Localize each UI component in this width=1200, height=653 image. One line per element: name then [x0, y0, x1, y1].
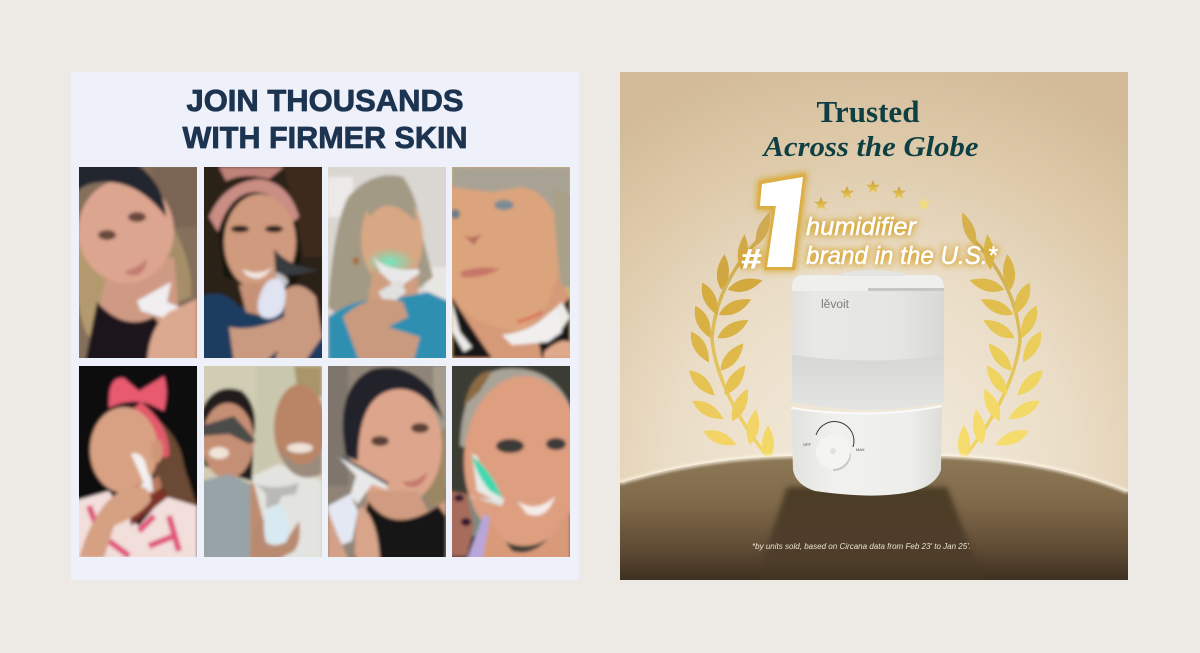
- icon: right laurel branch: [958, 210, 1047, 461]
- badge: number one humidifier brand: humidifier: [806, 213, 918, 241]
- footnote: *by units sold, based on Circana data from Feb 23' to Jan 25'.: [752, 542, 971, 551]
- icon: five stars arc: [814, 180, 931, 210]
- photo: blonde woman with green-lit device: [328, 167, 446, 358]
- dial: [803, 422, 865, 471]
- icon: left laurel branch: [685, 210, 774, 461]
- panel: trusted across the globe: [620, 72, 1128, 590]
- heading: trusted across the globe: [762, 100, 978, 156]
- floor with glowing horizon: [620, 456, 1128, 590]
- base: [791, 406, 942, 496]
- photo: woman with pink bow and floral robe: [79, 366, 197, 557]
- water level: [792, 355, 944, 410]
- badge: number one humidifier brand: 1: [742, 154, 809, 288]
- photo: woman with pink headband holding white device: [204, 167, 322, 358]
- dial: MAX: [856, 447, 865, 452]
- brand wordmark: lĕvoit: [821, 299, 850, 311]
- badge: number one humidifier brand: #: [741, 244, 761, 274]
- lid: [792, 275, 944, 291]
- badge: number one humidifier brand: [736, 168, 1004, 276]
- heading: join thousands with firmer skin: JOIN THOUSANDS: [186, 83, 464, 118]
- heading: join thousands with firmer skin: [182, 83, 468, 155]
- heading: trusted across the globe: Across the Globe: [761, 131, 979, 163]
- heading: trusted across the globe: Trusted: [816, 94, 920, 129]
- photo: woman with dark headband and neck device: [79, 167, 197, 358]
- photo: smiling woman with gray hair and green-lit device: [452, 366, 570, 557]
- panel: join thousands: [71, 72, 584, 580]
- photo: close-up woman with dark beanie and device: [328, 366, 446, 557]
- dial: OFF: [803, 442, 812, 447]
- photo: close-up older woman with red-lit device: [452, 167, 570, 358]
- humidifier product: [791, 270, 944, 496]
- photo: smiling couple with device: [204, 366, 322, 557]
- heading: join thousands with firmer skin: WITH FIRMER SKIN: [182, 120, 468, 155]
- badge: number one humidifier brand: brand in the U.S.*: [806, 242, 998, 270]
- tank: [792, 275, 944, 360]
- badge: number one humidifier brand: 1: [742, 154, 809, 288]
